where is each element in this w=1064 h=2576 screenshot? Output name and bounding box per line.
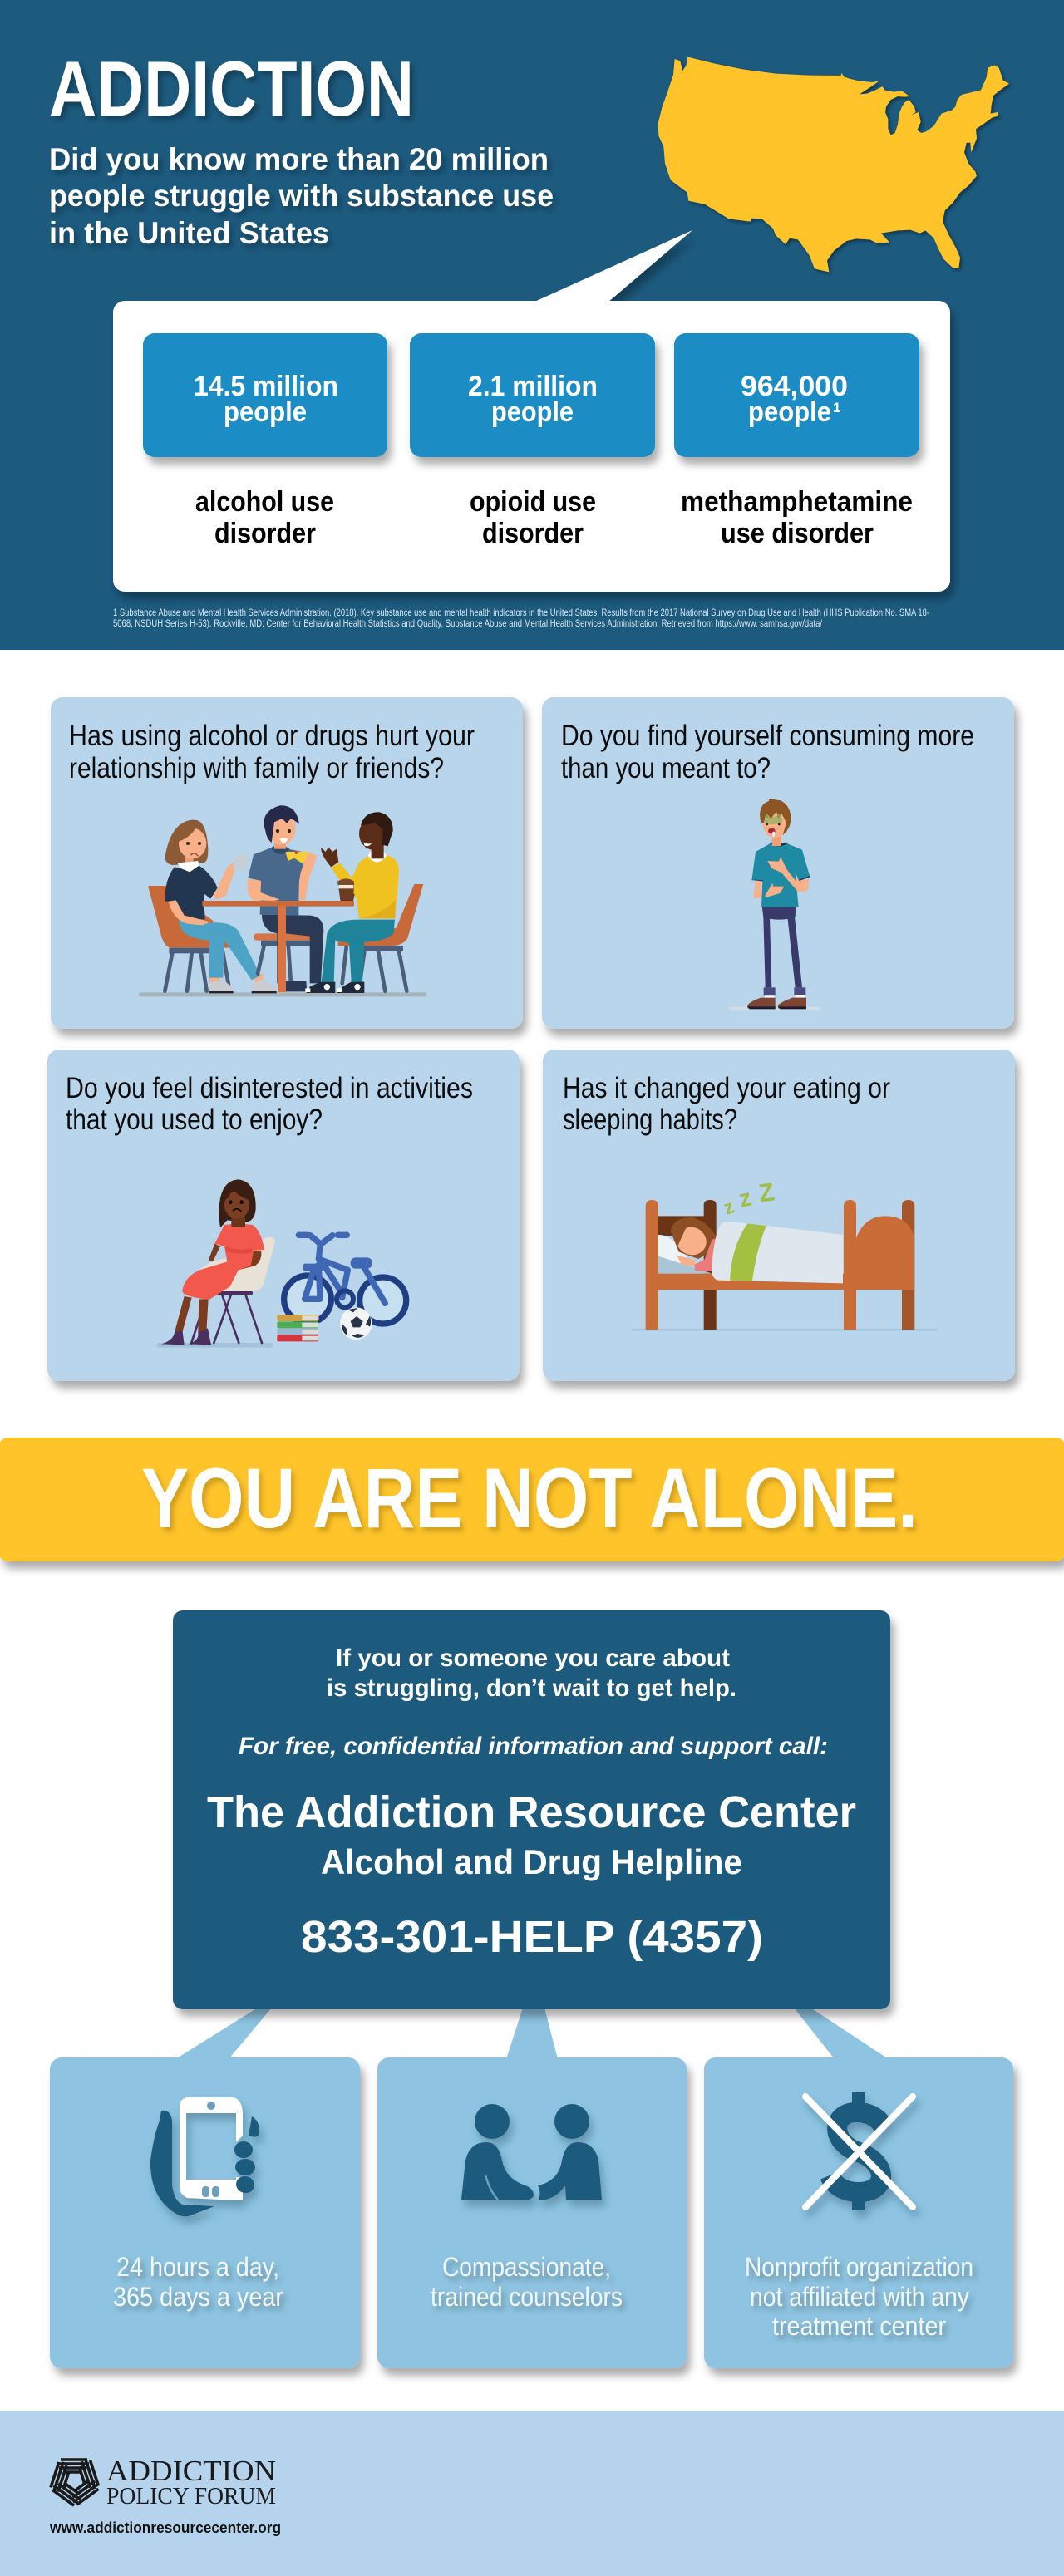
question text: Do you find yourself consuming more [561, 720, 974, 752]
helpline card [173, 1610, 890, 2009]
panel: 24 hours [50, 2057, 360, 2368]
website: www.addictionresourcecenter.org [49, 2519, 281, 2536]
question text [561, 720, 974, 784]
stat: opioid: people [491, 396, 574, 428]
question text: Do you feel disinterested in activities [66, 1072, 473, 1104]
pointer: card to third panel [794, 2008, 889, 2059]
caption [745, 2252, 973, 2341]
stat: methamphetamine: 1 [833, 400, 840, 415]
stat: opioid: 2.1 million [468, 371, 598, 402]
caption: 24 hours a day, [116, 2252, 279, 2282]
panel: counselors [377, 2057, 687, 2368]
encouragement text: If you or someone you care about [336, 1644, 730, 1672]
illustration: sick man standing [729, 799, 820, 1010]
panel: nonprofit [704, 2057, 1013, 2368]
label: methamphetamine use disorder: methamphetamine [681, 486, 913, 518]
icon: handshake [461, 2104, 602, 2200]
panel: disinterested [47, 1050, 520, 1381]
banner: you are not alone [0, 1438, 1064, 1561]
sleep letters: z [736, 1184, 754, 1213]
helpline name: Alcohol and Drug Helpline [321, 1842, 742, 1881]
center name: The Addiction Resource Center [207, 1787, 856, 1837]
footnote [113, 607, 929, 629]
icon: phone in hand [150, 2097, 259, 2216]
question text [69, 720, 475, 784]
illustration: person in bed [632, 1177, 938, 1331]
question text [563, 1072, 890, 1136]
stat: methamphetamine: people [748, 396, 831, 428]
question text: that you used to enjoy? [66, 1104, 323, 1136]
intro text: in the United States [49, 216, 329, 250]
header background [0, 0, 1064, 650]
encouragement text: is struggling, don’t wait to get help. [327, 1674, 736, 1702]
label: alcohol use disorder: alcohol use [195, 486, 334, 518]
panel: relationships [51, 697, 523, 1029]
sleep letters: z [721, 1195, 736, 1219]
intro text: Did you know more than 20 million [49, 142, 549, 176]
title: ADDICTION [49, 45, 414, 132]
footer background [0, 2411, 1064, 2576]
panel: eating or sleeping [543, 1050, 1015, 1381]
illustration: sad woman beside bike, books and ball [156, 1179, 406, 1348]
question text: sleeping habits? [563, 1104, 737, 1136]
wordmark [106, 2455, 276, 2510]
intro text: people struggle with substance use [49, 179, 554, 213]
illustration: three friends at a table [139, 805, 426, 996]
stat: alcohol: 14.5 million [194, 371, 338, 402]
question text: Has it changed your eating or [563, 1072, 890, 1104]
sleep letters [721, 1177, 776, 1219]
stat: methamphetamine [674, 333, 919, 457]
callout pointer [533, 230, 692, 302]
wordmark: ADDICTION [106, 2455, 276, 2487]
caption [113, 2252, 283, 2312]
caption: trained counselors [431, 2282, 623, 2312]
caption: Nonprofit organization [745, 2252, 973, 2282]
footnote: 5068, NSDUH Series H-53). Rockville, MD: Center for Behavioral Health Statistics and Quality, Substance Abuse and Mental Health Services Administration. Retrieved from https://www. samhsa.gov/data/ [113, 617, 823, 629]
label: opioid use disorder: opioid use [470, 486, 596, 518]
label: opioid use disorder [470, 486, 596, 549]
label: methamphetamine use disorder [681, 486, 913, 549]
label: alcohol use disorder [195, 486, 334, 549]
sleep letters: Z [756, 1177, 776, 1208]
stat: alcohol [143, 333, 387, 457]
label: alcohol use disorder: disorder [214, 518, 316, 549]
support prompt: For free, confidential information and support call: [239, 1733, 828, 1760]
caption [431, 2252, 623, 2312]
caption: treatment center [772, 2311, 946, 2341]
panel: consuming more [542, 697, 1014, 1029]
caption: Compassionate, [442, 2252, 611, 2282]
logo: Addiction Policy Forum [50, 2455, 276, 2510]
icon: pentagon mark [50, 2459, 100, 2506]
stat: opioid [410, 333, 655, 457]
map of the United States [658, 57, 1009, 272]
question text: relationship with family or friends? [69, 752, 444, 784]
caption: not affiliated with any [750, 2282, 969, 2312]
encouragement text [327, 1644, 736, 1702]
label: methamphetamine use disorder: use disorder [721, 518, 874, 549]
icon: crossed-out dollar [805, 2092, 913, 2210]
wordmark: POLICY FORUM [106, 2483, 276, 2510]
question text: Has using alcohol or drugs hurt your [69, 720, 475, 752]
banner: you are not alone: YOU ARE NOT ALONE. [141, 1451, 918, 1546]
stat: methamphetamine: 964,000 [741, 371, 848, 402]
caption: 365 days a year [113, 2282, 283, 2312]
stat: alcohol: people [224, 396, 307, 428]
label: opioid use disorder: disorder [482, 518, 584, 549]
question text [66, 1072, 473, 1136]
pointer: card to first panel [175, 2008, 272, 2059]
callout card [113, 230, 950, 592]
pointer: card to second panel [506, 2008, 558, 2059]
phone number: 833-301-HELP (4357) [301, 1912, 763, 1962]
white panel [113, 301, 950, 592]
question text: than you meant to? [561, 752, 771, 784]
intro text [49, 142, 554, 250]
